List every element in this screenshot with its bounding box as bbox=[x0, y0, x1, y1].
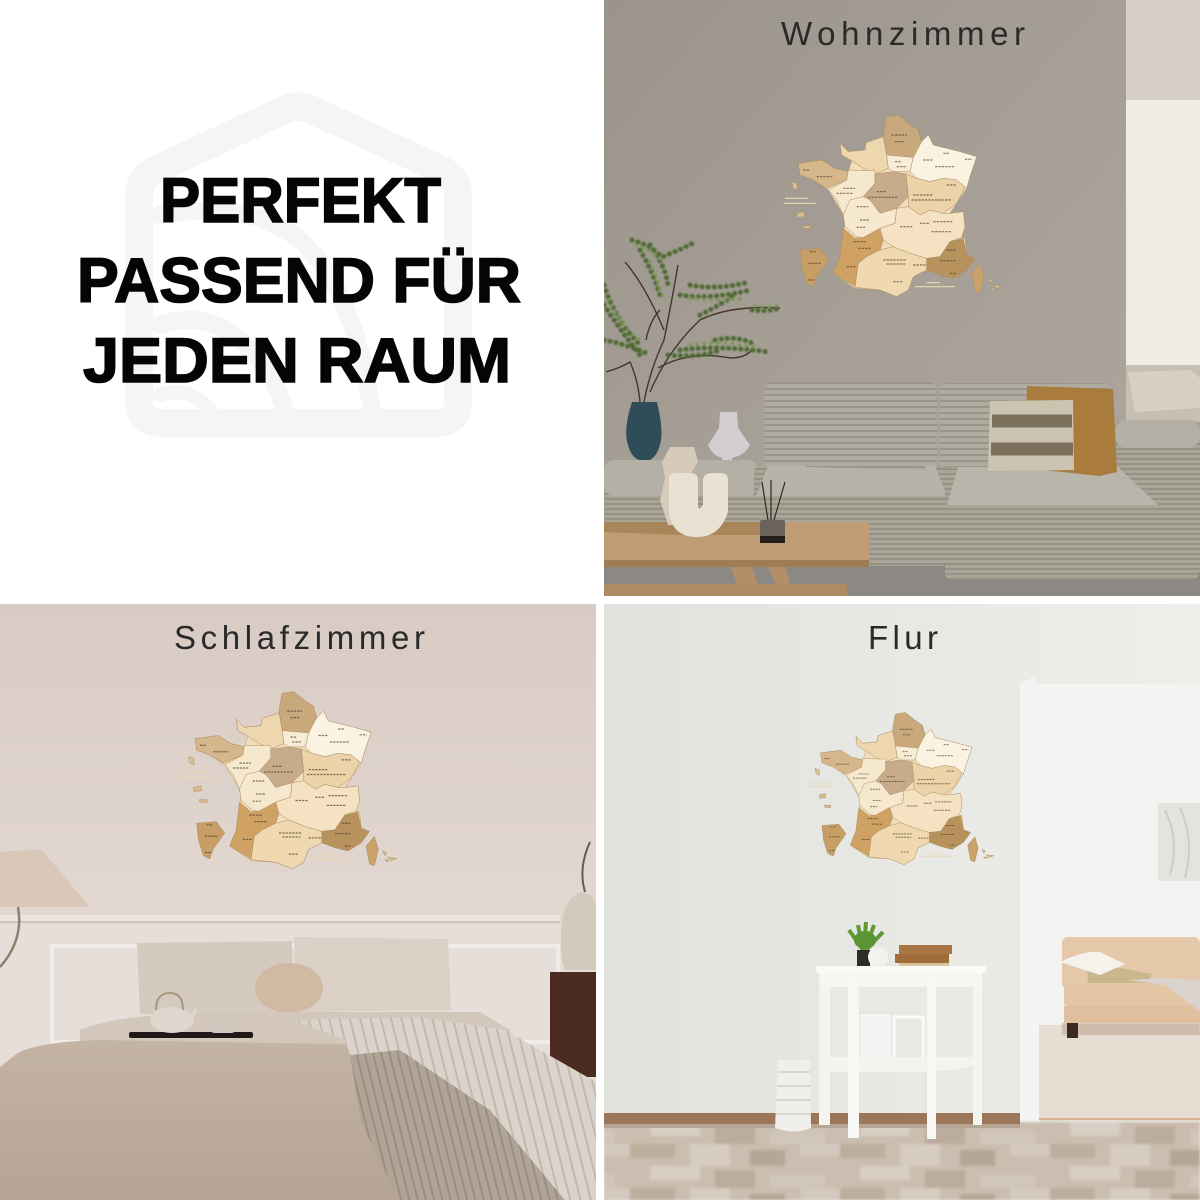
teal vase bbox=[626, 402, 661, 461]
panel: headline bbox=[77, 106, 521, 423]
concrete wall bbox=[604, 0, 1126, 522]
bed bbox=[0, 1012, 510, 1200]
side table and vase bbox=[550, 842, 596, 1077]
decor vases bbox=[660, 447, 728, 537]
plant bbox=[604, 240, 782, 402]
floor vase bbox=[775, 1060, 811, 1132]
knitted blanket bbox=[293, 1017, 596, 1200]
panel: Wohnzimmer photo bbox=[604, 0, 1200, 596]
sofa bbox=[604, 382, 1200, 580]
coffee table bbox=[604, 522, 869, 596]
pillows bbox=[137, 937, 451, 1014]
label: Wohnzimmer: Wohnzimmer bbox=[781, 15, 1025, 52]
title text: PASSEND FÜR bbox=[77, 246, 521, 316]
diffuser bbox=[760, 480, 785, 543]
window area bbox=[1126, 0, 1200, 430]
wall moulding bbox=[0, 915, 560, 1044]
plant and books bbox=[849, 922, 952, 967]
next room bbox=[1038, 695, 1200, 1121]
sofa in next room bbox=[1060, 937, 1200, 1038]
title text: JEDEN RAUM bbox=[83, 326, 511, 396]
wall bbox=[0, 604, 596, 1200]
map on wall bbox=[784, 115, 1003, 297]
carpet floor bbox=[604, 564, 1200, 596]
title text: PERFEKT bbox=[160, 166, 441, 236]
wall bbox=[604, 604, 1200, 1200]
panel: Flur photo bbox=[604, 604, 1200, 1200]
map on wall bbox=[808, 713, 994, 865]
tray and teapot bbox=[129, 993, 253, 1038]
map on wall bbox=[181, 692, 397, 869]
icon: house watermark bbox=[139, 106, 458, 423]
cushions bbox=[804, 386, 1117, 476]
lamp bbox=[0, 850, 90, 967]
panel: Schlafzimmer photo bbox=[0, 604, 596, 1200]
label: Schlafzimmer: Schlafzimmer bbox=[174, 619, 425, 656]
floor bbox=[604, 1113, 1200, 1200]
white vase bbox=[708, 412, 750, 462]
console table bbox=[816, 966, 986, 1139]
door frame bbox=[1020, 678, 1156, 1122]
label: Flur: Flur bbox=[868, 619, 938, 656]
title text bbox=[77, 166, 521, 396]
